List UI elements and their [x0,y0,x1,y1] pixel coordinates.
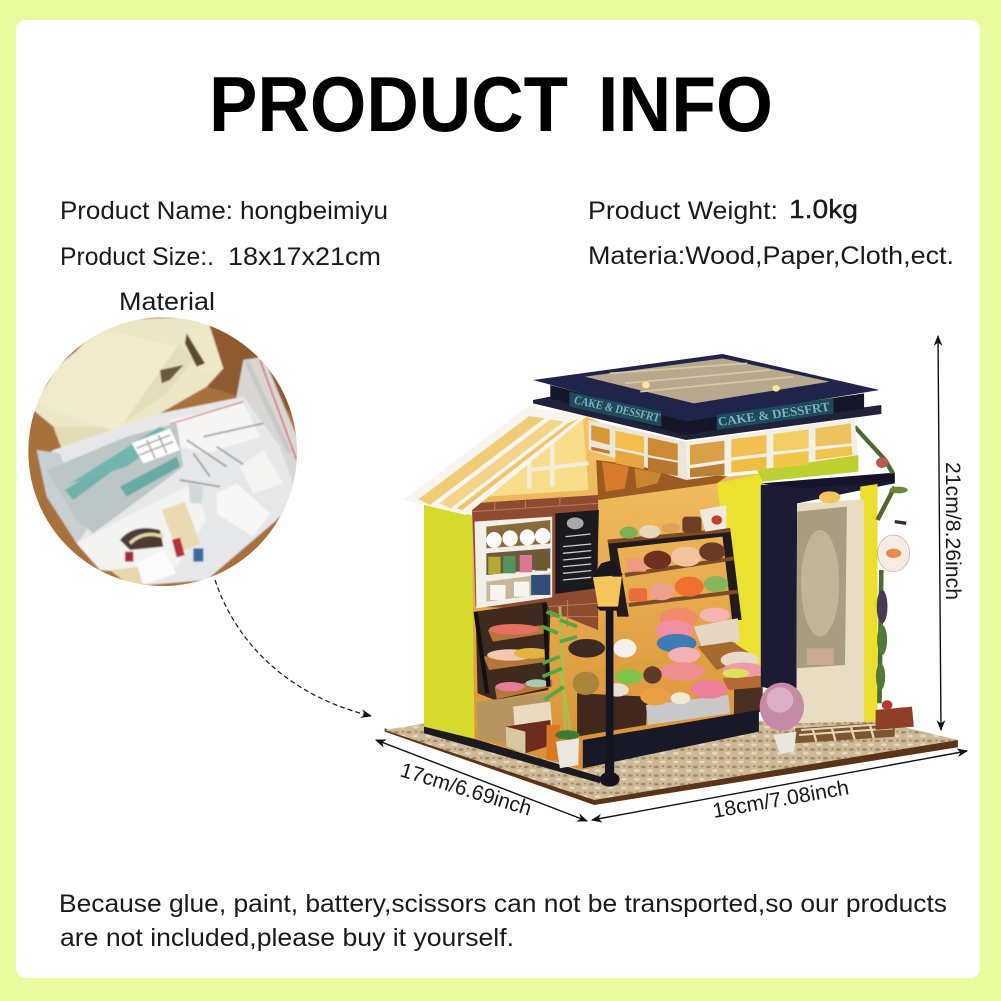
title: PRODUCT [209,60,568,148]
door [796,491,864,723]
product weight [588,194,858,225]
red berry [876,457,888,468]
pastry case [476,602,552,700]
tiered cakes [568,608,730,705]
product specifications text block [60,194,954,271]
roof [533,354,881,440]
width dimension arrow [592,751,967,820]
height dimension label: 21cm/8.26inch [941,462,964,600]
dashed connector arrow [215,580,371,716]
upper windows [589,418,858,480]
left yellow wall [424,503,475,739]
brick planter [876,700,914,730]
storage boxes [476,693,560,760]
dollhouse model [385,354,958,805]
potted pink tree [760,683,804,754]
left shop sign [569,392,662,427]
product weight: 1.0kg [789,194,858,224]
depth dimension arrow [376,740,587,821]
right shop sign: CAKE & DESSFRT [717,400,831,429]
width dimension label: 18cm/7.08inch [711,776,851,823]
door frame [761,473,895,695]
green band [757,455,858,482]
height dimension arrow [938,336,941,730]
bottom notice text [59,890,947,952]
title [209,60,773,148]
climbing vine [855,427,908,703]
base platform [385,720,958,805]
cakes on second shelf [627,542,725,572]
product size: Product Size:. [60,243,214,271]
product weight: Product Weight: [588,197,778,225]
brick wall [472,495,598,630]
chalkboard menu [555,510,599,594]
product materials: Materia:Wood,Paper,Cloth,ect. [588,242,954,270]
left wall base [424,727,600,783]
potted bamboo plant [543,607,580,768]
cakes on third shelf [629,576,728,602]
white cabinet [475,517,552,608]
street lamp [592,560,623,787]
material photo circle [28,317,297,586]
product name: hongbeimiyu [240,197,388,225]
wall art [596,460,726,500]
glass roof [403,407,587,515]
yellow right strip [860,484,878,722]
depth dimension label: 17cm/6.69inch [398,759,534,821]
product size: 18x17x21cm [228,243,381,271]
display counter and table [571,618,768,737]
display shelf [608,505,742,620]
material label: Material [119,288,215,316]
bottom notice text: are not included,please buy it yourself. [60,924,514,952]
bottom notice text: Because glue, paint, battery,scissors can not be transported,so our products [59,890,947,918]
product name [60,197,388,225]
front counter [583,710,759,768]
cakes on top shelf [620,505,726,539]
product name: Product Name: [60,197,233,225]
product size [60,243,381,271]
hanging shop sign [878,522,910,572]
title: INFO [598,60,773,148]
back wall right [717,473,763,710]
gable windows [487,418,589,497]
interior [472,417,759,770]
left shop sign: CAKE & DESSFRT [572,393,662,425]
